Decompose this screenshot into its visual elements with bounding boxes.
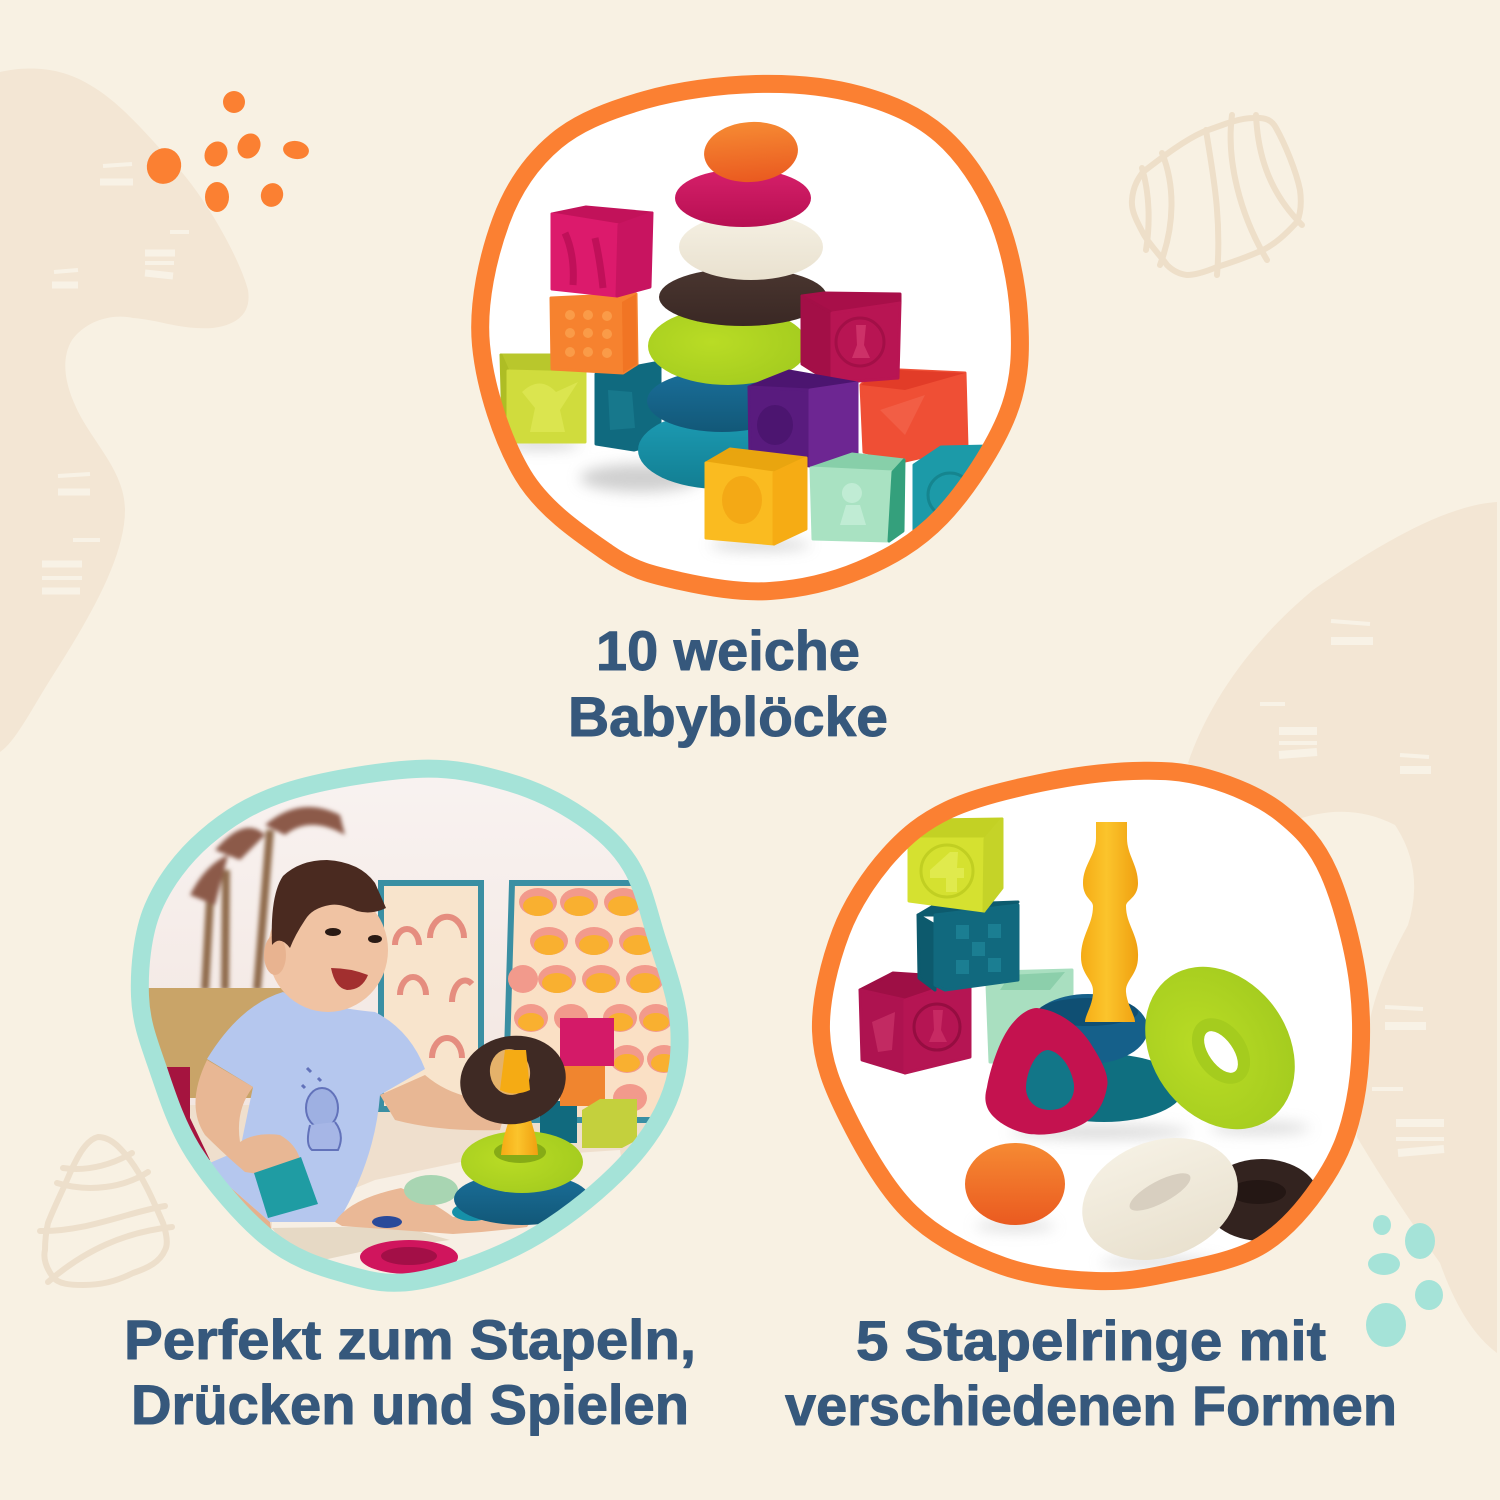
panel: blocks photo: [480, 84, 1020, 591]
blue fluff: [372, 1216, 402, 1228]
green fluff: [404, 1175, 458, 1205]
background blob: left: [0, 68, 249, 752]
text: bottom left caption: [124, 1308, 696, 1436]
onesie: [205, 992, 425, 1222]
block: red-orange: [861, 369, 967, 461]
background blob: right: [1188, 502, 1497, 1353]
floor: [190, 1105, 646, 1230]
icon: outlined egg top right: [1132, 115, 1302, 275]
rug: [272, 1150, 621, 1274]
burlap cloth: [272, 1226, 450, 1259]
text: bottom right caption: verschiedenen Formen: [785, 1374, 1397, 1437]
background blocks: [540, 1018, 637, 1148]
block: dark teal: [596, 362, 660, 450]
block: teal: [918, 902, 1018, 990]
block: purple: [749, 371, 857, 466]
panel border: [480, 84, 1020, 591]
panel: baby photo: [130, 760, 690, 1295]
block: crimson: [802, 293, 900, 383]
block: lime: [501, 355, 585, 442]
block: crimson: [860, 973, 970, 1073]
side blocks: [162, 1067, 210, 1160]
text: top caption: Babyblöcke: [568, 685, 888, 748]
block: orange hearts: [551, 294, 637, 373]
block: yellow: [706, 449, 806, 544]
mouth: [331, 968, 368, 990]
block: lime: [909, 819, 1002, 911]
text: bottom left caption: Drücken und Spielen: [131, 1373, 689, 1436]
ring stack: [452, 1027, 590, 1225]
decorative dots: orange: [141, 91, 310, 212]
disc: orange: [965, 1143, 1065, 1225]
text: top caption: 10 weiche: [596, 619, 860, 682]
left arm: [195, 1060, 301, 1180]
panel border: [140, 769, 680, 1283]
panel border: [821, 771, 1361, 1281]
panel: rings photo: [821, 771, 1361, 1281]
text: top caption: [568, 619, 888, 748]
rings stack: [638, 119, 827, 489]
near leg: [335, 1188, 534, 1234]
teal block in hand: [254, 1157, 318, 1218]
ring: teal: [1024, 1054, 1184, 1122]
far leg: [231, 1188, 271, 1229]
head: [269, 904, 388, 1012]
basket: [145, 988, 285, 1098]
stacker: yellow: [1081, 822, 1138, 1022]
block: teal right: [912, 444, 983, 530]
ring: lime: [1114, 938, 1326, 1158]
ring: brown: [1204, 1159, 1320, 1241]
poster: rainbows: [381, 883, 481, 1109]
decorative dots: teal: [1366, 1215, 1443, 1347]
toy shadows: [975, 1122, 1310, 1267]
crimson ring: [360, 1240, 458, 1274]
icon: outlined egg bottom left: [40, 1137, 172, 1285]
text: bottom right caption: 5 Stapelringe mit: [856, 1309, 1326, 1372]
block: mint: [987, 970, 1072, 1062]
baby: [195, 860, 534, 1255]
ring: crimson: [985, 1008, 1108, 1135]
hair: [272, 860, 386, 948]
lion print: [302, 1068, 341, 1150]
block: pink: [552, 207, 652, 296]
text: bottom right caption: [785, 1309, 1397, 1437]
ring: blue: [1028, 994, 1148, 1064]
eyes: [325, 928, 341, 936]
right arm: [380, 1075, 505, 1130]
ring: cream: [1065, 1117, 1255, 1281]
text: bottom left caption: Perfekt zum Stapeln,: [124, 1308, 696, 1371]
wall fill: [130, 760, 690, 1110]
toy shadows: [500, 439, 810, 550]
plant: [190, 807, 345, 990]
block: mint: [811, 454, 904, 541]
poster: pattern: [505, 883, 681, 1120]
ear: [264, 935, 286, 975]
